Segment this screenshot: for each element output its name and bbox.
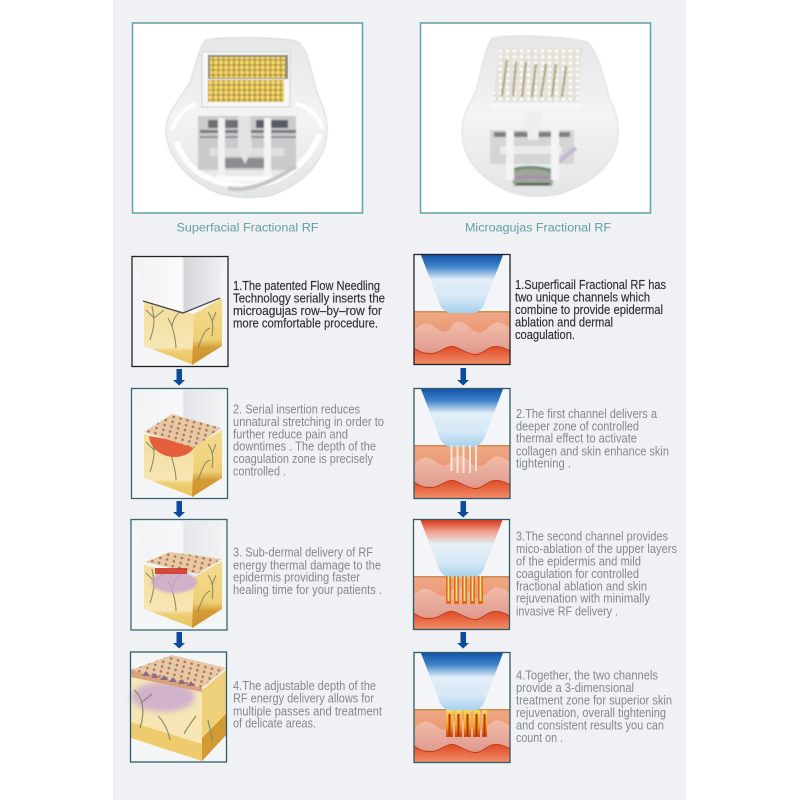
left step 4 text: 4.The adjustable depth of the xyxy=(233,679,376,693)
left step 2 text: downtimes . The depth of the xyxy=(233,440,376,454)
left step 1 illustration xyxy=(132,256,228,366)
left step 1 text: 1.The patented Flow Needling xyxy=(233,279,380,293)
right step 1 text: ablation and dermal xyxy=(515,315,613,329)
left step 4 text: RF energy delivery allows for xyxy=(233,692,374,706)
right step 3 text: fractional ablation and skin xyxy=(516,579,647,593)
right step 3 text: invasive RF delivery . xyxy=(516,604,618,618)
left step 2 illustration xyxy=(132,388,228,498)
icon: microagujas tip body xyxy=(462,36,618,196)
panel: superfacial handpiece photo xyxy=(132,23,362,213)
right step 4 text: 4.Together, the two channels xyxy=(516,669,658,683)
right step 3 text xyxy=(516,530,677,618)
right step 3 text: rejuvenation with minimally xyxy=(516,592,651,606)
right step 3 text: 3.The second channel provides xyxy=(516,530,668,544)
page background panel xyxy=(113,0,686,800)
arrow 3 right xyxy=(457,632,469,648)
right step 3 text: coagulation for controlled xyxy=(516,567,639,581)
left step 2 text xyxy=(233,402,384,479)
left step 2 text: unnatural stretching in order to xyxy=(233,415,384,429)
left step 2 text: controlled . xyxy=(233,465,286,479)
arrow 1 left xyxy=(173,369,185,386)
left step 3 text: energy thermal damage to the xyxy=(233,558,381,572)
left step 2 text: 2. Serial insertion reduces xyxy=(233,402,360,416)
right step 1 text: two unique channels which xyxy=(515,290,650,304)
right step 4 text: and consistent results you can xyxy=(516,718,664,732)
caption: Microagujas Fractional RF: Microagujas Fractional RF xyxy=(465,220,611,234)
right step 2 text: deeper zone of controlled xyxy=(516,419,639,433)
right step 1 text: coagulation. xyxy=(515,328,575,342)
left step 3 text: 3. Sub-dermal delivery of RF xyxy=(233,546,373,560)
right step 4 text: treatment zone for superior skin xyxy=(516,693,672,707)
right step 1 text: combine to provide epidermal xyxy=(515,303,663,317)
left step 4 text xyxy=(233,679,382,731)
panel: microagujas handpiece photo xyxy=(420,23,650,213)
right step 4 text: count on . xyxy=(516,731,563,745)
right step 2 text: tightening . xyxy=(516,457,571,471)
left step 3 text xyxy=(233,546,382,597)
right step 1 text xyxy=(515,278,666,342)
left step 4 illustration xyxy=(130,652,226,762)
right step 4 text: provide a 3-dimensional xyxy=(516,681,634,695)
right step 3 text: mico-ablation of the upper layers xyxy=(516,542,677,556)
left step 4 text: of delicate areas. xyxy=(233,717,316,731)
right step 1 illustration xyxy=(414,254,510,364)
caption: Superfacial Fractional RF: Superfacial Fractional RF xyxy=(176,220,318,234)
arrow 1 right xyxy=(457,368,469,386)
left step 1 text: more comfortable procedure. xyxy=(233,316,378,330)
right step 3 text: of the epidermis and mild xyxy=(516,555,641,569)
right step 1 text: 1.Superficail Fractional RF has xyxy=(515,278,666,292)
left step 3 text: epidermis providing faster xyxy=(233,571,360,585)
left step 3 text: healing time for your patients . xyxy=(233,583,382,597)
right step 4 illustration xyxy=(414,652,510,762)
left step 3 illustration xyxy=(131,520,227,630)
left step 1 text: Technology serially inserts the xyxy=(233,291,385,305)
left step 1 text: microagujas row–by–row for xyxy=(233,304,382,318)
right step 2 illustration xyxy=(414,388,510,498)
icon: superfacial tip body xyxy=(166,37,327,197)
arrow 3 left xyxy=(173,632,185,648)
right step 2 text xyxy=(516,407,669,471)
right step 4 text xyxy=(516,669,672,745)
left step 4 text: multiple passes and treatment xyxy=(233,704,382,718)
right step 2 text: collagen and skin enhance skin xyxy=(516,444,669,458)
right step 2 text: thermal effect to activate xyxy=(516,432,637,446)
arrow 2 right xyxy=(457,501,469,518)
left step 2 text: further reduce pain and xyxy=(233,427,348,441)
arrow 2 left xyxy=(173,501,185,518)
left step 2 text: coagulation zone is precisely xyxy=(233,452,374,466)
left step 1 text xyxy=(233,279,385,330)
right step 4 text: rejuvenation, overall tightening xyxy=(516,706,666,720)
right step 2 text: 2.The first channel delivers a xyxy=(516,407,657,421)
right step 3 illustration xyxy=(414,519,510,630)
